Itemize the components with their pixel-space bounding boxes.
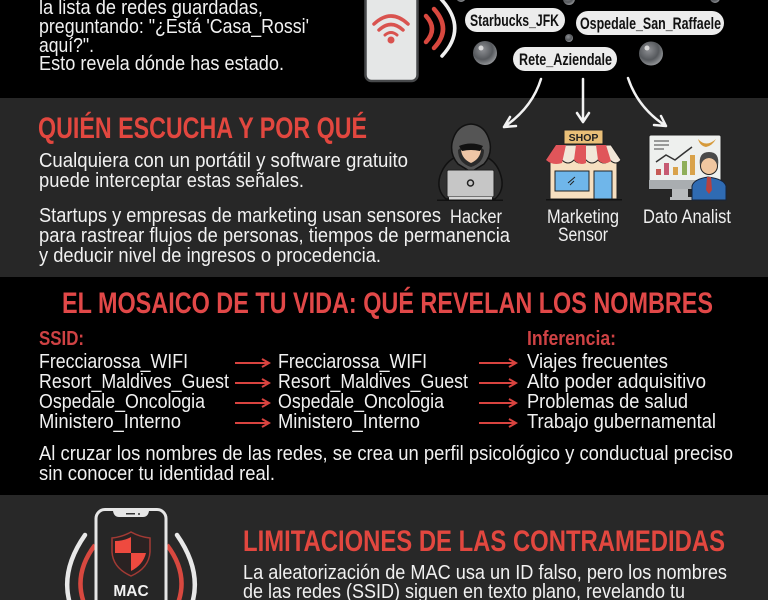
pill: Rete_Aziendale: Rete_Aziendale bbox=[519, 51, 612, 69]
arrow: to hacker bbox=[504, 79, 541, 127]
icon: shop: SHOP bbox=[569, 132, 598, 144]
icon: phone with shield bbox=[96, 510, 166, 600]
column: SSID: Frecciarossa_WIFI bbox=[39, 350, 188, 373]
bubbles bbox=[456, 0, 720, 66]
text block: probe explanation bbox=[39, 0, 309, 75]
arrows: to inference bbox=[479, 359, 516, 427]
icon: signal arcs around phone bbox=[67, 535, 195, 600]
column: SSID: Ospedale_Oncologia bbox=[39, 390, 206, 413]
text block: anyone can intercept: Cualquiera con un portátil y software gratuito bbox=[39, 149, 408, 172]
panel: how phones reveal networks bbox=[0, 0, 768, 98]
text block: startups and marketing: para rastrear flujos de personas, tiempos de permanencia bbox=[39, 224, 511, 247]
panel: who listens and why bbox=[0, 98, 768, 277]
pill: Starbucks_JFK bbox=[465, 8, 565, 32]
text block: probe explanation: Esto revela dónde has estado. bbox=[39, 52, 284, 75]
text block: probe explanation: aquí?". bbox=[39, 34, 94, 57]
panel: limitations of countermeasures bbox=[0, 495, 768, 600]
column: SSID: SSID: bbox=[39, 328, 84, 350]
column: SSID repeated bbox=[278, 350, 468, 433]
column: inference: Problemas de salud bbox=[527, 390, 688, 413]
text block: anyone can intercept bbox=[39, 149, 408, 192]
text block: startups and marketing: Startups y empresas de marketing usan sensores bbox=[39, 204, 441, 227]
column: inference: Alto poder adquisitivo bbox=[527, 370, 706, 393]
column: SSID: Ministero_Interno bbox=[39, 410, 181, 433]
icon: phone with shield: MAC bbox=[113, 583, 149, 600]
column: inference: Inferencia: bbox=[527, 328, 616, 350]
column: SSID bbox=[39, 328, 229, 433]
text block: profile conclusion bbox=[39, 442, 733, 485]
icon: hacker bbox=[437, 124, 503, 201]
column: SSID repeated: Ospedale_Oncologia bbox=[278, 390, 445, 413]
text block: profile conclusion: sin conocer tu identidad real. bbox=[39, 462, 275, 485]
column: SSID repeated: Resort_Maldives_Guest bbox=[278, 370, 468, 393]
icon: shop bbox=[546, 130, 622, 200]
column: SSID: Resort_Maldives_Guest bbox=[39, 370, 229, 393]
pill: Ospedale_San_Raffaele bbox=[576, 11, 724, 35]
column: SSID repeated: Ministero_Interno bbox=[278, 410, 420, 433]
text block: probe explanation: preguntando: "¿Está 'Casa_Rossi' bbox=[39, 15, 309, 38]
text block: startups and marketing: y deducir nivel de ingresos o procedencia. bbox=[39, 244, 381, 267]
text block: MAC randomization bbox=[243, 561, 727, 600]
text block: anyone can intercept: puede interceptar estas señales. bbox=[39, 169, 304, 192]
text block: startups and marketing bbox=[39, 204, 511, 267]
column: inference: Trabajo gubernamental bbox=[527, 410, 716, 433]
panel: mosaic of your life bbox=[0, 277, 768, 496]
pill: Rete_Aziendale bbox=[513, 47, 617, 71]
icon: phone with wifi bbox=[366, 0, 418, 81]
arrows: SSID to duplicate bbox=[235, 359, 269, 427]
icon: signal waves bbox=[426, 0, 455, 56]
column: SSID repeated: Frecciarossa_WIFI bbox=[278, 350, 427, 373]
label: Dato Analist: Dato Analist bbox=[643, 207, 732, 228]
icon: data analyst bbox=[649, 135, 726, 200]
column: inference bbox=[527, 328, 716, 433]
heading: who listens: QUIÉN ESCUCHA Y POR QUÉ bbox=[38, 111, 367, 145]
arrow: to marketing sensor bbox=[577, 79, 589, 122]
label: Hacker: Hacker bbox=[450, 207, 503, 228]
column: inference: Viajes frecuentes bbox=[527, 350, 668, 373]
pill: Starbucks_JFK: Starbucks_JFK bbox=[470, 12, 559, 30]
pill: Ospedale_San_Raffaele: Ospedale_San_Raffaele bbox=[580, 15, 721, 33]
label: Marketing Sensor: Marketing bbox=[547, 207, 619, 228]
arrow: to data analyst bbox=[628, 78, 666, 126]
label: Marketing Sensor: Sensor bbox=[558, 225, 609, 246]
label: Marketing Sensor bbox=[547, 207, 619, 246]
